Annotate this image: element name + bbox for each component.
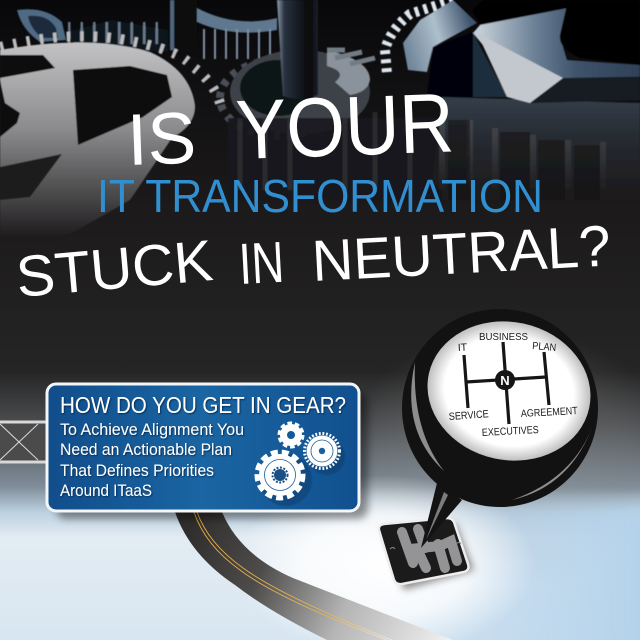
title: is your: IS: [126, 98, 198, 181]
info panel: [47, 384, 359, 511]
medium gear: [304, 434, 340, 468]
rear gears: [17, 0, 277, 52]
shift labels: BUSINESS: [479, 331, 528, 343]
title: it transformation: IT TRANSFORMATION: [97, 170, 543, 222]
title: stuck in neutral: IN: [237, 230, 286, 297]
right silver gear: [385, 0, 640, 103]
knob face: [414, 306, 604, 476]
panel body text: To Achieve Alignment You: [60, 420, 244, 439]
panel heading: HOW DO YOU GET IN GEAR?: [60, 392, 346, 418]
panel body text: [60, 420, 244, 500]
foreground gear rack: [228, 97, 640, 200]
shift pattern: [448, 331, 579, 439]
title: stuck in neutral: STUCK: [13, 228, 216, 310]
panel body text: That Defines Priorities: [60, 461, 214, 480]
title: is your: [126, 75, 455, 181]
background machinery gears: [0, 0, 640, 240]
shift labels: PLAN: [532, 340, 557, 354]
small gear: [280, 424, 302, 446]
sign support truss: [0, 422, 48, 462]
shift pattern: N: [500, 373, 510, 388]
gear shift knob: [379, 306, 604, 590]
shift labels: EXECUTIVES: [482, 424, 539, 439]
title: stuck in neutral: NEUTRAL?: [310, 213, 612, 294]
shift lever: [421, 483, 462, 548]
shift labels: AGREEMENT: [521, 405, 579, 420]
shifter base plate: [379, 518, 468, 584]
panel body text: Need an Actionable Plan: [60, 440, 232, 459]
shift labels: IT: [458, 341, 468, 354]
icon: three gears: [257, 424, 345, 506]
large silver gear: [0, 36, 222, 240]
shift labels: SERVICE: [448, 408, 489, 423]
panel body text: Around ITaaS: [60, 481, 152, 500]
panel shadow: [56, 393, 368, 519]
central ring gear: [220, 50, 375, 136]
base plate shadow: [384, 524, 474, 590]
central shaft: [277, 0, 318, 99]
shift labels: [448, 331, 579, 439]
gear cut-outs: [0, 55, 172, 200]
title: is your: YOUR: [234, 75, 455, 177]
knob ball: [402, 309, 598, 507]
road: [175, 512, 453, 640]
title: stuck in neutral: [13, 213, 612, 310]
large gear: [257, 452, 303, 498]
neutral marker: [495, 370, 515, 390]
